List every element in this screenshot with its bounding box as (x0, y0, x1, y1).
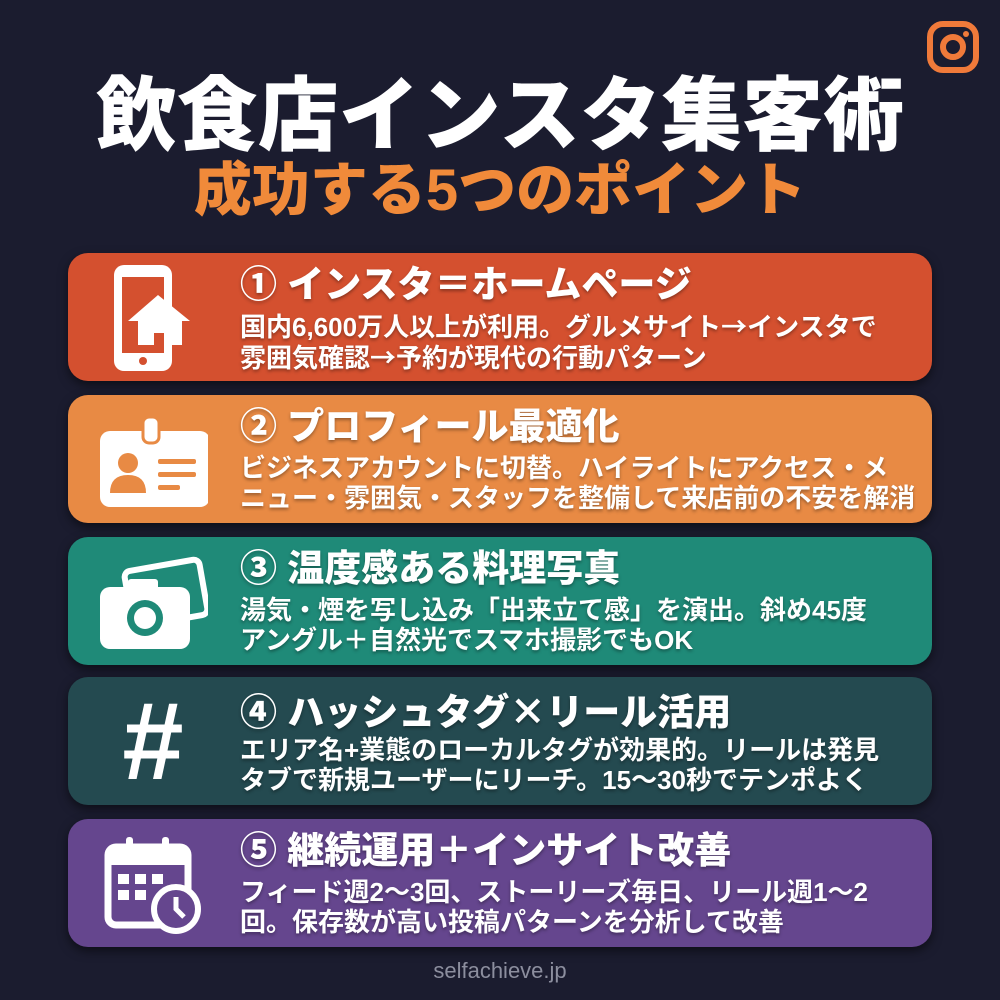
panel: 3: 湯気・煙を写し込み「出来立て感」を演出。斜め45度 (240, 595, 867, 625)
icon: calendar cycle (104, 837, 201, 934)
icon: camera (100, 556, 208, 649)
panel: 5: フィード週2〜3回、ストーリーズ毎日、リール週1〜2 (240, 877, 868, 907)
panel: 3: アングル＋自然光でスマホ撮影でもOK (240, 625, 693, 655)
panel: 3 (68, 537, 932, 665)
subtitle: 成功する5つのポイント (194, 158, 806, 223)
panel: 1: 国内6,600万人以上が利用。グルメサイト→インスタで (240, 307, 877, 344)
panel: 1: ① インスタ＝ホームページ (240, 264, 692, 305)
panel: 3: ③ 温度感ある料理写真 (240, 548, 620, 589)
panel: 4: ④ ハッシュタグ×リール活用 (240, 682, 731, 736)
panel: 5 (68, 819, 932, 947)
panel: 4 (68, 677, 932, 805)
panel: 2: ビジネスアカウントに切替。ハイライトにアクセス・メ (240, 453, 888, 483)
panel: 5: ⑤ 継続運用＋インサイト改善 (240, 830, 731, 871)
panel: 5: 回。保存数が高い投稿パターンを分析して改善 (240, 907, 784, 937)
panel: 1 (68, 253, 932, 381)
icon: phone home (114, 265, 190, 371)
icon: id card (100, 418, 208, 507)
panel: 4: タブで新規ユーザーにリーチ。15〜30秒でテンポよく (240, 765, 868, 795)
icon: hashtag: # (122, 680, 184, 803)
panel: 2: ニュー・雰囲気・スタッフを整備して来店前の不安を解消 (240, 483, 915, 513)
footer: selfachieve.jp (433, 958, 567, 983)
panel: 1: 雰囲気確認→予約が現代の行動パターン (240, 338, 707, 375)
panel: 4: エリア名+業態のローカルタグが効果的。リールは発見 (240, 735, 879, 765)
panel: 2 (68, 395, 932, 523)
panel: 2: ② プロフィール最適化 (240, 406, 620, 447)
title: 飲食店インスタ集客術 (96, 72, 904, 162)
icon: instagram (927, 21, 979, 73)
